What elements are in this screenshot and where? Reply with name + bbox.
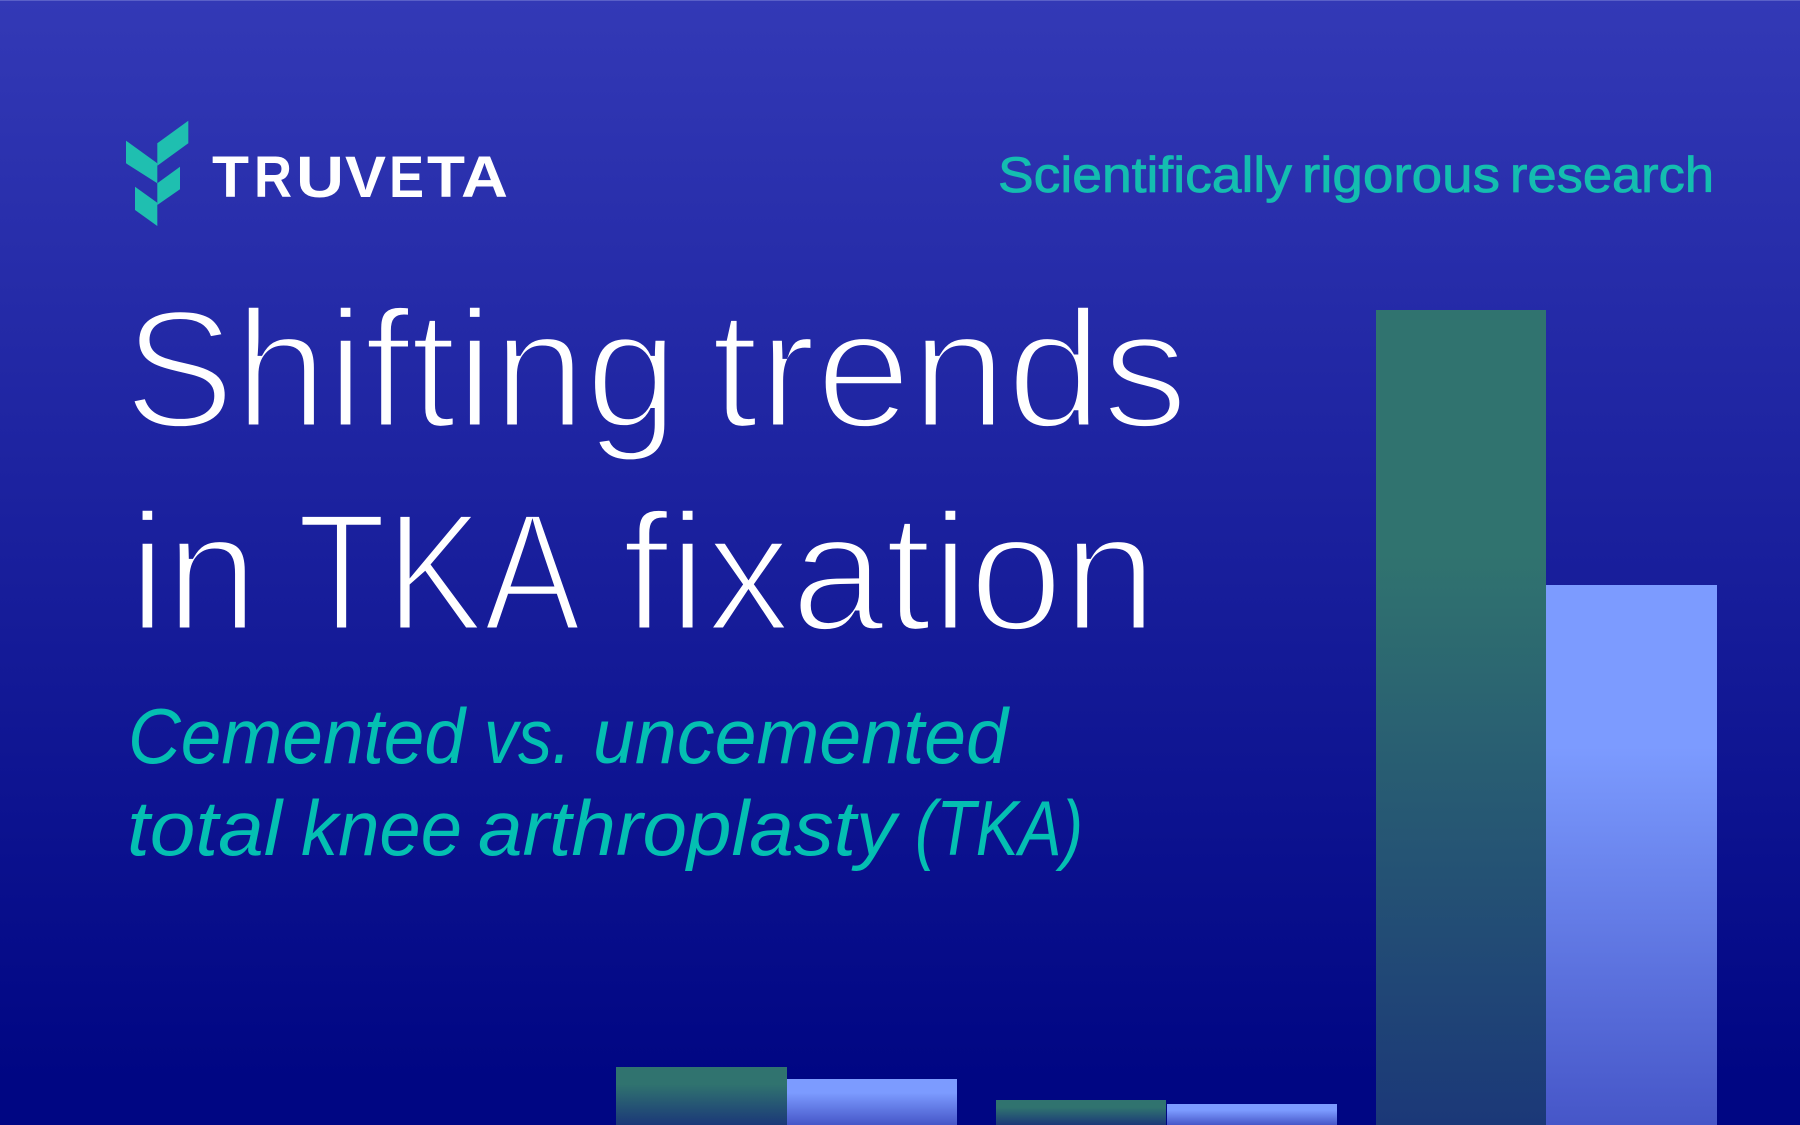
title: Shifting bbox=[124, 275, 678, 463]
logo wordmark: T bbox=[212, 145, 249, 210]
bar group 3 bbox=[1376, 310, 1717, 1125]
logo wordmark: A bbox=[461, 145, 508, 210]
bar chart bbox=[616, 310, 1717, 1125]
subtitle: arthroplasty bbox=[478, 784, 900, 872]
subtitle: knee bbox=[301, 784, 462, 872]
tagline: rigorous bbox=[1302, 147, 1500, 203]
logo wordmark: R bbox=[254, 145, 292, 210]
subtitle: Cemented bbox=[128, 692, 467, 780]
bar group 1 bbox=[616, 1067, 957, 1125]
icon: Truveta logo mark bbox=[126, 121, 188, 226]
title: in bbox=[129, 478, 258, 666]
title: trends bbox=[711, 275, 1188, 463]
title: TKA bbox=[297, 478, 581, 666]
logo wordmark: V bbox=[345, 145, 386, 210]
subtitle: total bbox=[127, 784, 285, 872]
logo wordmark: T bbox=[427, 145, 465, 210]
tagline bbox=[998, 147, 1714, 203]
subtitle: uncemented bbox=[593, 692, 1011, 780]
tagline: Scientifically bbox=[998, 147, 1292, 203]
logo wordmark: U bbox=[296, 145, 344, 210]
title: fixation bbox=[622, 478, 1157, 666]
bar group 2 bbox=[996, 1100, 1337, 1125]
tagline: research bbox=[1510, 147, 1714, 203]
subtitle: vs. bbox=[484, 692, 571, 780]
subtitle: (TKA) bbox=[915, 784, 1083, 872]
logo wordmark bbox=[212, 145, 508, 210]
subtitle bbox=[127, 692, 1083, 872]
logo wordmark: E bbox=[389, 145, 424, 210]
title bbox=[124, 275, 1188, 666]
